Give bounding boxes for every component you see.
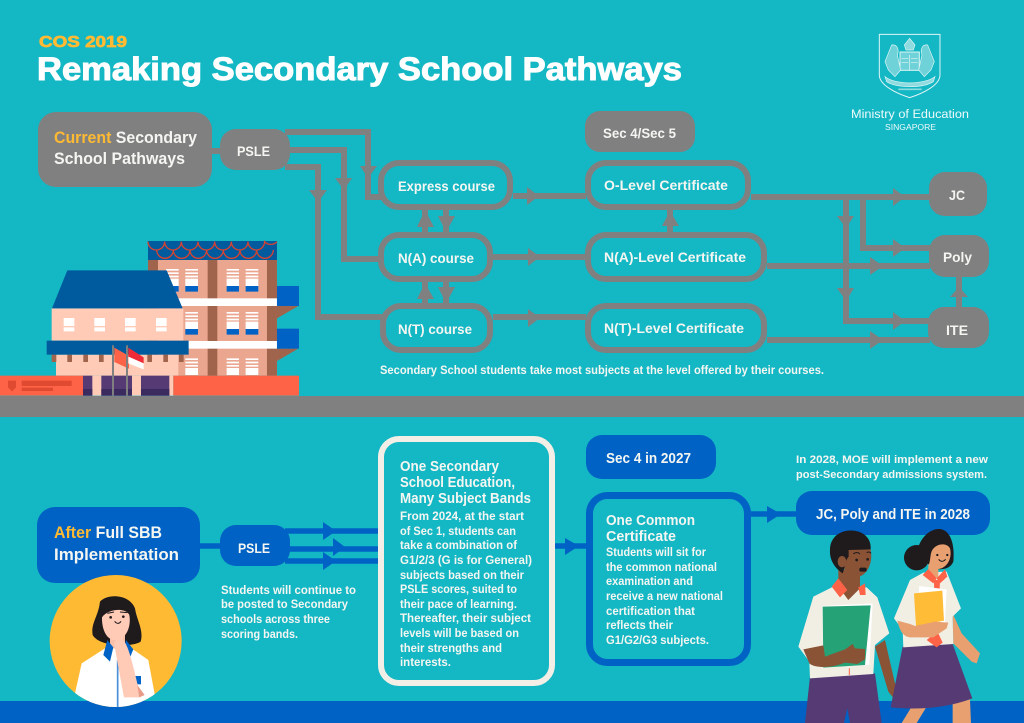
connecting lines [212,132,959,340]
panel body: PSLE scores, suited to [400,584,517,596]
panel body: levels will be based on [400,628,519,640]
title block [37,34,682,87]
panel body: Students will sit for [606,547,706,559]
label: Current Secondary School Pathways [38,112,212,187]
panel heading [400,459,531,507]
flowchart: after full SBB [37,435,990,683]
panel body: Thereafter, their subject [400,613,531,625]
panel body: examination and [606,576,693,588]
text: admissions note [796,454,988,481]
panel body [400,511,532,669]
node: JC: JC [949,187,965,203]
node: N(T)-Level Certificate [588,306,764,350]
node: JC, Poly and ITE in 2028: JC, Poly and ITE in 2028 [816,507,970,523]
panel body: their pace of learning. [400,599,517,611]
text: scoring bands: scoring bands. [221,629,298,641]
panel body: interests. [400,657,451,669]
label: After Full SBB Implementation [37,507,200,583]
text: scoring bands [221,585,356,641]
node: Express course [381,163,510,207]
logo: Ministry of Education [851,34,969,132]
panel body: subjects based on their [400,570,525,582]
panel body: reflects their [606,620,674,632]
text: scoring bands: Students will continue to [221,585,356,597]
text: admissions note: post-Secondary admissions system. [796,469,987,481]
illustration: school building [0,241,299,396]
node: N(T) course: N(T) course [398,321,472,337]
icon: crest [879,34,940,98]
panel heading: School Education, [400,475,515,491]
bottom band [0,701,1024,723]
panel body: of Sec 1, students can [400,526,516,538]
label: Current Secondary School Pathways: Current Secondary [54,129,198,147]
caption: Secondary School students take most subjects at the level offered by their courses. [380,365,824,377]
illustration: two students [798,529,980,723]
road divider [0,396,1024,417]
text: scoring bands: be posted to Secondary [221,599,349,611]
node: O-Level Certificate [588,163,748,207]
panel body: their strengths and [400,643,502,655]
panel body: the common national [606,562,717,574]
tag: Sec 4/Sec 5: Sec 4/Sec 5 [603,126,676,141]
flowchart: current pathways [38,111,989,377]
panel body: From 2024, at the start [400,511,524,523]
label: After Full SBB Implementation: Implementation [54,546,179,564]
node: N(A)-Level Certificate [588,235,764,279]
text: admissions note: In 2028, MOE will implement a new [796,454,988,466]
panel: subject bands [381,439,552,683]
node: PSLE [220,129,290,170]
panel heading: Certificate [606,529,676,545]
node: N(A)-Level Certificate: N(A)-Level Certificate [604,249,746,265]
connecting lines [198,514,798,561]
node: N(T) course [383,306,490,350]
illustration: thinking student [50,575,182,708]
country name: SINGAPORE [885,123,937,132]
panel heading: Many Subject Bands [400,491,531,507]
arrowheads [309,166,968,349]
panel body: G1/G2/G3 subjects. [606,635,709,647]
kicker: COS 2019: COS 2019 [39,34,127,51]
label: After Full SBB Implementation: After Full SBB [54,524,162,542]
girl [891,529,980,723]
tag: Sec 4/Sec 5 [585,111,695,152]
panel body: receive a new national [606,591,723,603]
tag: Sec 4 in 2027: Sec 4 in 2027 [606,451,691,467]
node: PSLE: PSLE [238,540,270,556]
panel body: G1/2/3 (G is for General) [400,555,532,567]
node: PSLE [220,525,290,566]
node: ITE: ITE [946,322,968,338]
boy [798,530,905,723]
panel heading: One Secondary [400,459,499,475]
node: JC [929,172,987,216]
panel body [606,547,723,647]
organisation name: Ministry of Education [851,107,969,121]
node: N(A) course [381,235,490,279]
panel body: certification that [606,606,695,618]
panel body: take a combination of [400,540,517,552]
panel heading [606,513,695,545]
node: N(T)-Level Certificate: N(T)-Level Certificate [604,320,744,336]
arrowheads [323,506,781,570]
node: JC, Poly and ITE in 2028 [796,491,990,535]
label: Current Secondary School Pathways: School Pathways [54,150,185,168]
tag: Sec 4 in 2027 [586,435,716,479]
node: Poly [929,235,989,277]
node: Express course: Express course [398,178,495,194]
node: ITE [928,307,989,348]
panel heading: One Common [606,513,695,529]
main title: Remaking Secondary School Pathways [37,51,682,87]
text: scoring bands: schools across three [221,614,330,626]
panel: common certificate [590,496,748,662]
node: O-Level Certificate: O-Level Certificate [604,177,728,193]
node: Poly: Poly [943,249,972,265]
node: N(A) course: N(A) course [398,250,474,266]
node: PSLE: PSLE [237,143,270,159]
